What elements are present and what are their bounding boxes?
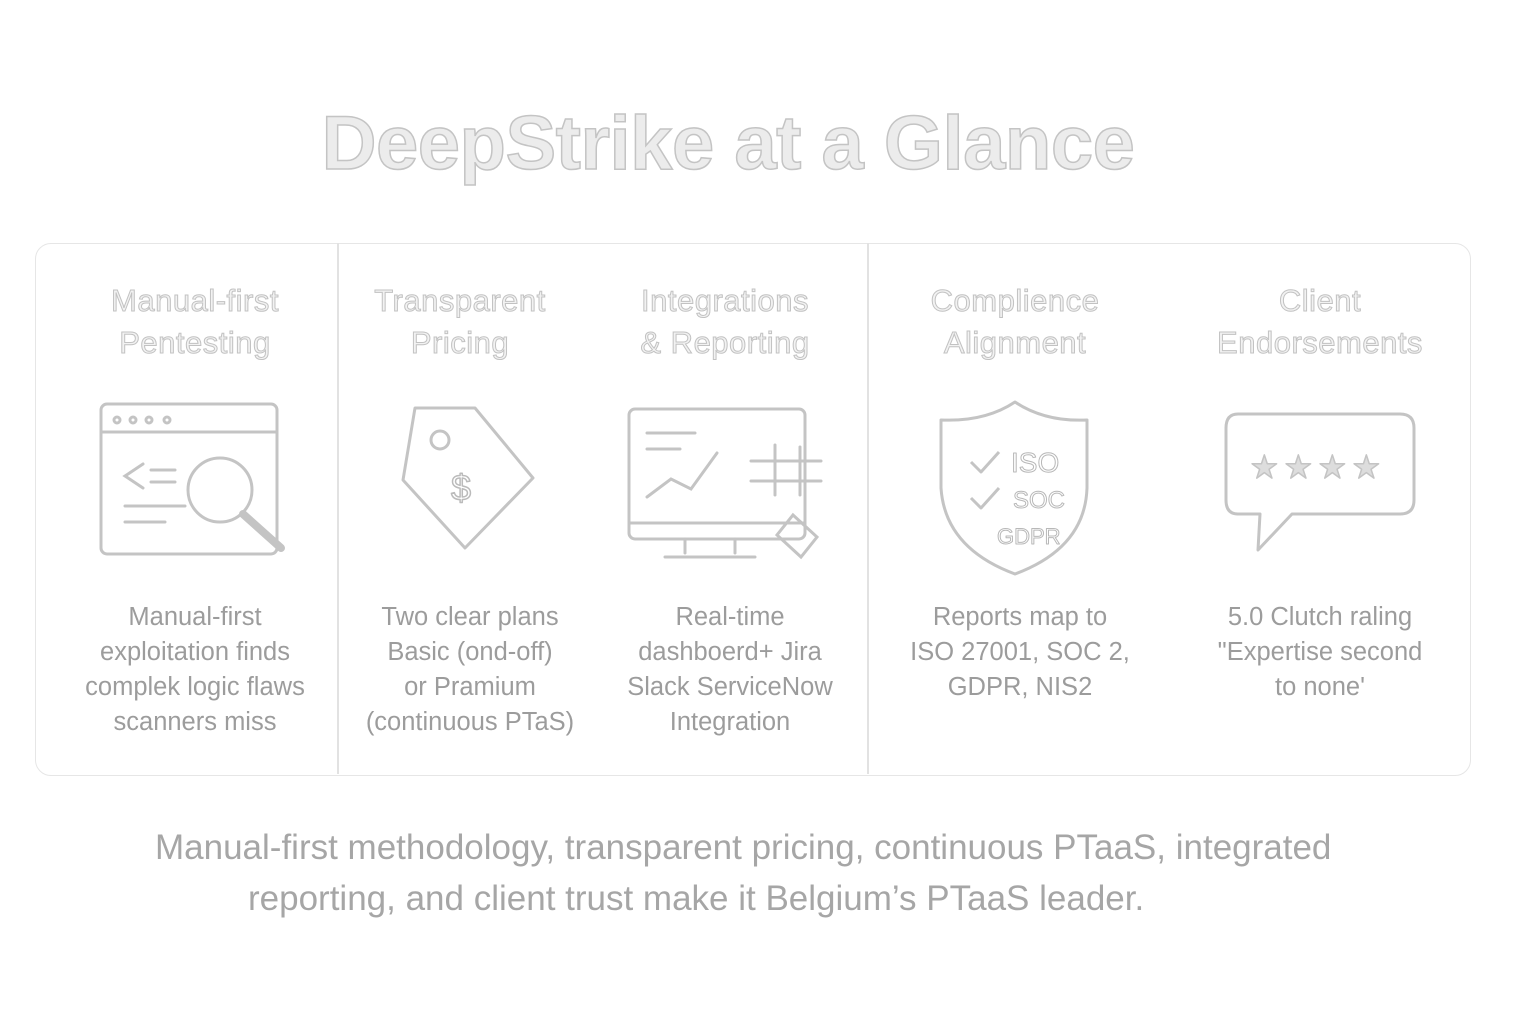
icon: monitor dashboard with integrations — [628, 408, 822, 560]
text: compliance body: Reports map to — [933, 603, 1107, 631]
icon: shield with ISO SOC GDPR: GDPR — [997, 524, 1061, 549]
icon: speech bubble with stars: ★ — [1284, 448, 1313, 486]
heading: manual-first: Pentesting — [119, 325, 271, 360]
heading: compliance: Complience — [931, 283, 1099, 318]
heading: pricing: Pricing — [411, 325, 509, 360]
text: endorsements body: to none' — [1275, 673, 1365, 701]
text: integrations body: Real-time — [675, 603, 785, 631]
text: compliance body: ISO 27001, SOC 2, — [910, 638, 1130, 666]
text: pricing body: Basic (ond-off) — [387, 638, 553, 666]
icon: speech bubble with stars: ★ — [1318, 448, 1347, 486]
heading: compliance: Alignment — [944, 325, 1086, 360]
text: compliance body — [910, 603, 1130, 701]
icon: shield with ISO SOC GDPR: ISO — [1011, 447, 1059, 478]
icon: speech bubble with stars: ★ — [1250, 448, 1279, 486]
icon: speech bubble with stars: ★ — [1352, 448, 1381, 486]
text: manual-first body: complek logic flaws — [85, 673, 305, 701]
title: DeepStrike at a Glance — [322, 101, 1134, 186]
heading: endorsements — [1217, 283, 1423, 360]
icon: price tag — [402, 406, 534, 550]
text: endorsements body: "Expertise second — [1218, 638, 1422, 666]
text: compliance body: GDPR, NIS2 — [948, 673, 1092, 701]
heading: manual-first — [111, 283, 279, 360]
heading: integrations: & Reporting — [640, 325, 810, 360]
icon: price tag: $ — [451, 467, 471, 508]
heading: integrations — [640, 283, 810, 360]
heading: integrations: Integrations — [641, 283, 809, 318]
heading: pricing: Transparent — [374, 283, 546, 318]
text: endorsements body — [1218, 603, 1422, 701]
text: manual-first body: Manual-first — [128, 603, 262, 631]
text: integrations body — [627, 603, 833, 736]
text: integrations body: Integration — [670, 708, 790, 736]
text: integrations body: Slack ServiceNow — [627, 673, 833, 701]
heading: pricing — [374, 283, 546, 360]
panel: card container — [35, 243, 1471, 776]
footer summary: Manual-first methodology, transparent pricing, continuous PTaaS, integrated — [155, 828, 1331, 867]
heading: manual-first: Manual-first — [111, 283, 279, 318]
heading: compliance — [931, 283, 1099, 360]
text: pricing body: Two clear plans — [381, 603, 559, 631]
heading: endorsements: Endorsements — [1217, 325, 1423, 360]
text: manual-first body: exploitation finds — [100, 638, 290, 666]
heading: endorsements: Client — [1279, 283, 1361, 318]
text: endorsements body: 5.0 Clutch raling — [1228, 603, 1412, 631]
text: manual-first body: scanners miss — [114, 708, 276, 736]
text: pricing body: (continuous PTaS) — [366, 708, 574, 736]
icon: shield with ISO SOC GDPR — [940, 400, 1088, 576]
footer summary: reporting, and client trust make it Belgium’s PTaaS leader. — [248, 879, 1144, 918]
text: pricing body: or Pramium — [404, 673, 536, 701]
icon: shield with ISO SOC GDPR: SOC — [1013, 487, 1065, 514]
icon: speech bubble with stars — [1224, 412, 1416, 552]
text: manual-first body — [85, 603, 305, 736]
icon: browser with magnifier — [100, 402, 285, 556]
text: pricing body — [366, 603, 574, 736]
text: integrations body: dashboerd+ Jira — [638, 638, 822, 666]
